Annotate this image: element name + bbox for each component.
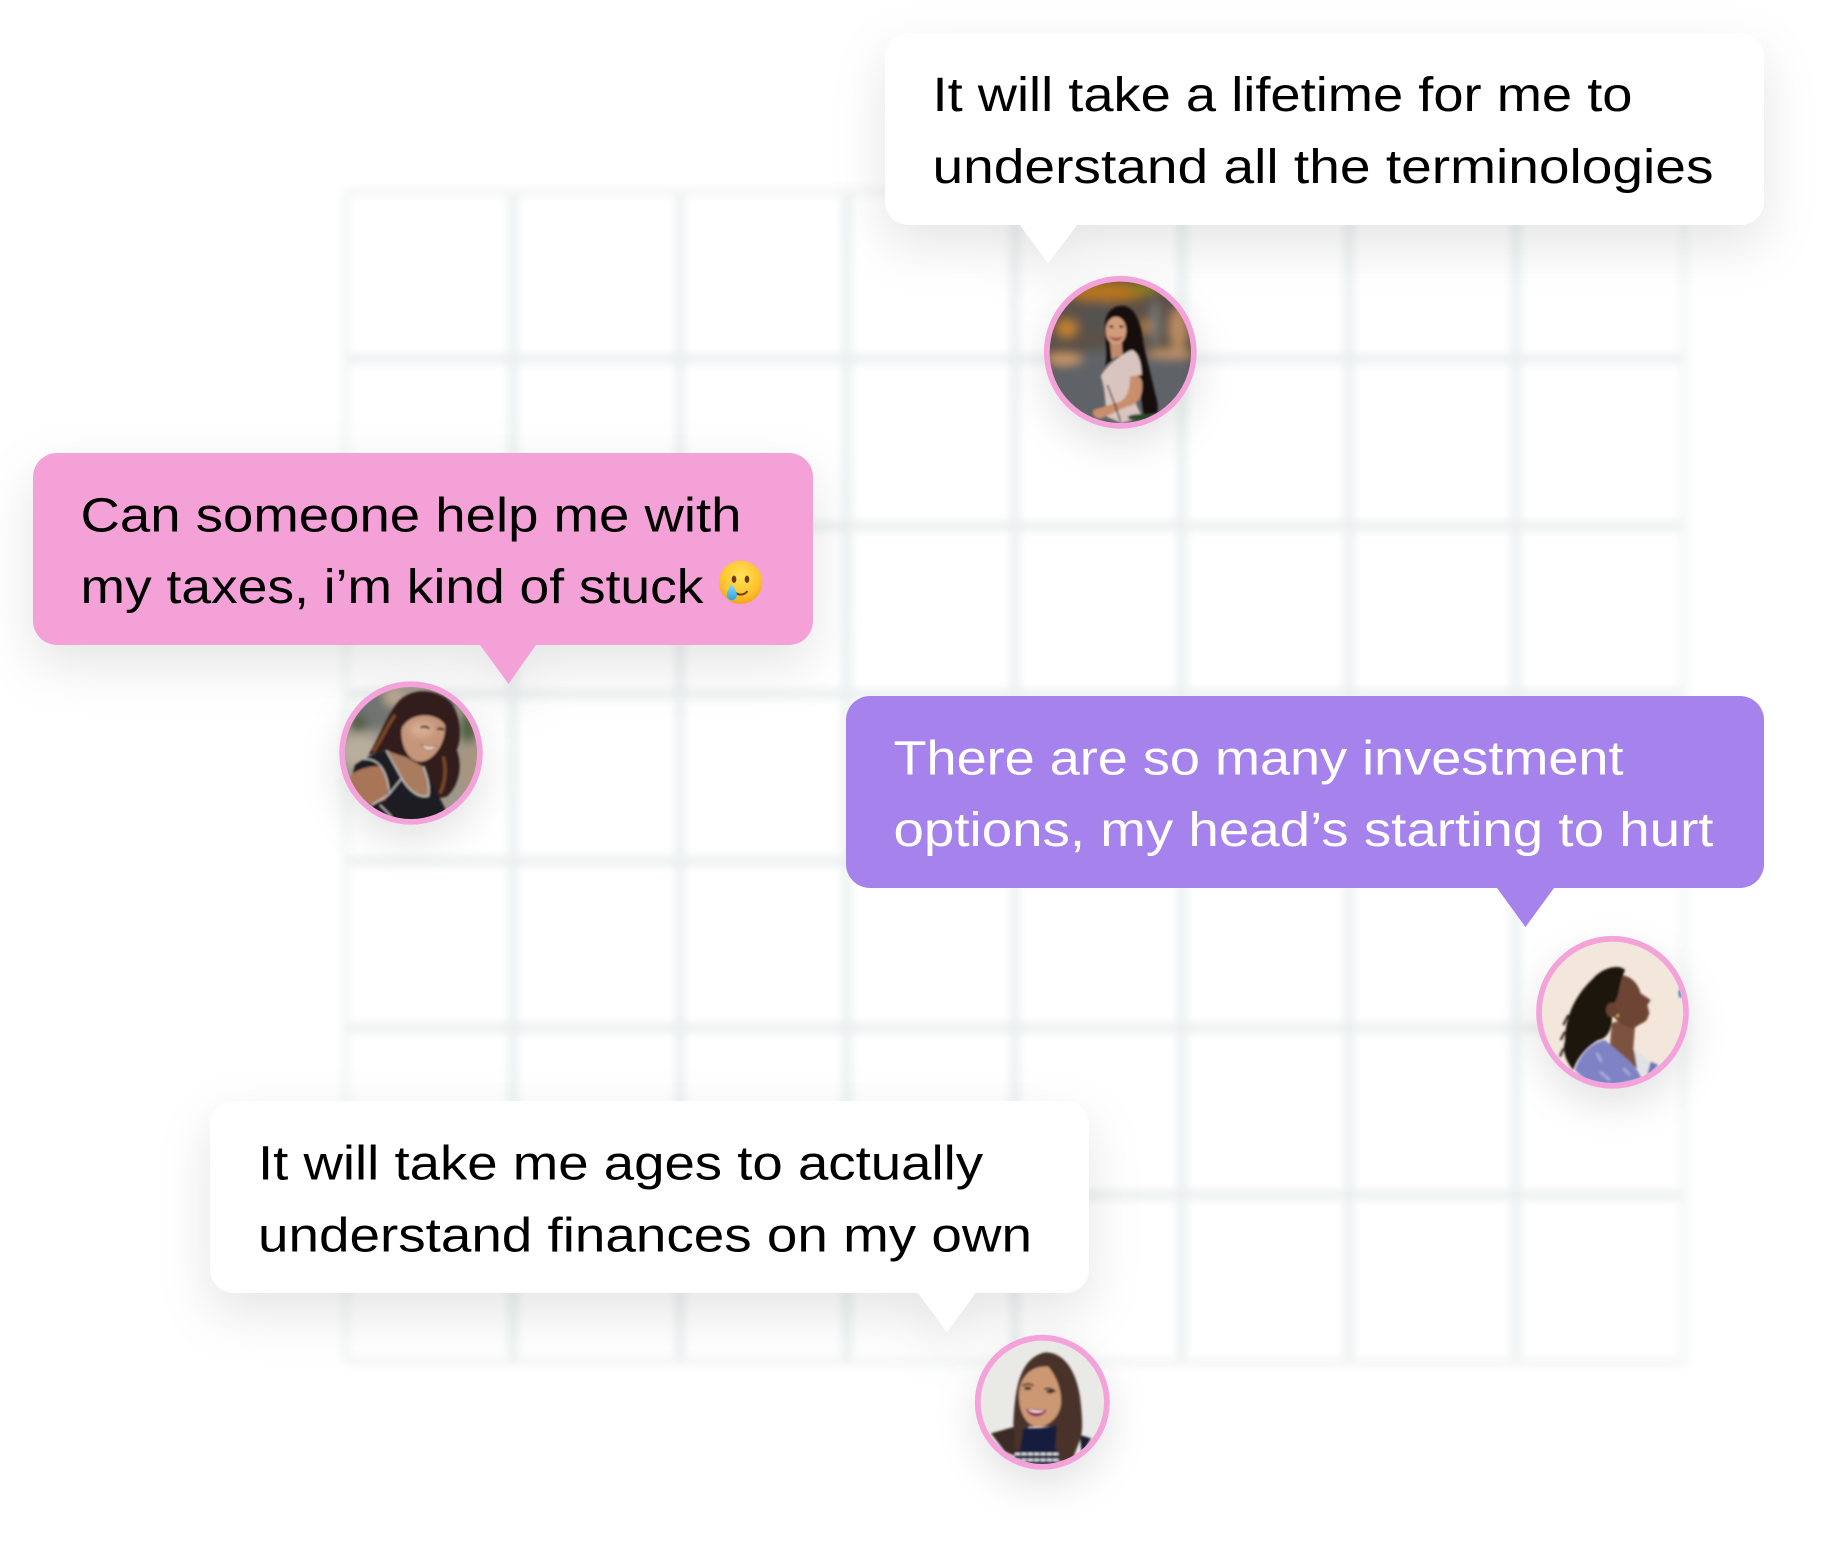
bubble text: [894, 732, 1714, 857]
speech bubble: ages to understand finances: [210, 1101, 1089, 1332]
speech bubble: investment options: [846, 696, 1764, 927]
avatar: smiling woman in black top: [339, 681, 483, 825]
bubble text: [80, 490, 742, 614]
bubble text: [932, 69, 1714, 194]
avatar: woman with long hair on road: [1044, 276, 1197, 429]
bubble text: understand all the terminologies: [932, 141, 1714, 194]
bubble text: It will take a lifetime for me to: [932, 69, 1632, 122]
bubble text: There are so many investment: [894, 732, 1624, 786]
speech bubble: help with taxes: [33, 453, 813, 684]
bubble text: [258, 1138, 1032, 1262]
bubble shape purple: [846, 696, 1764, 927]
bubble text: understand finances on my own: [258, 1210, 1032, 1262]
bubble text: It will take me ages to actually: [258, 1138, 983, 1190]
avatar: smiling woman with striped top: [975, 1335, 1110, 1470]
bubble text: my taxes, i’m kind of stuck: [80, 561, 705, 614]
bubble shape white: [885, 33, 1764, 263]
bubble text: options, my head’s starting to hurt: [894, 804, 1714, 857]
speech bubble: lifetime terminologies: [885, 33, 1764, 263]
icon: smiling face with tear emoji: [719, 561, 762, 604]
bubble shape pink: [33, 453, 813, 684]
avatar: woman in profile with blue kurta: [1536, 936, 1689, 1089]
bubble text: Can someone help me with: [80, 490, 742, 542]
bubble shape white: [210, 1101, 1089, 1332]
